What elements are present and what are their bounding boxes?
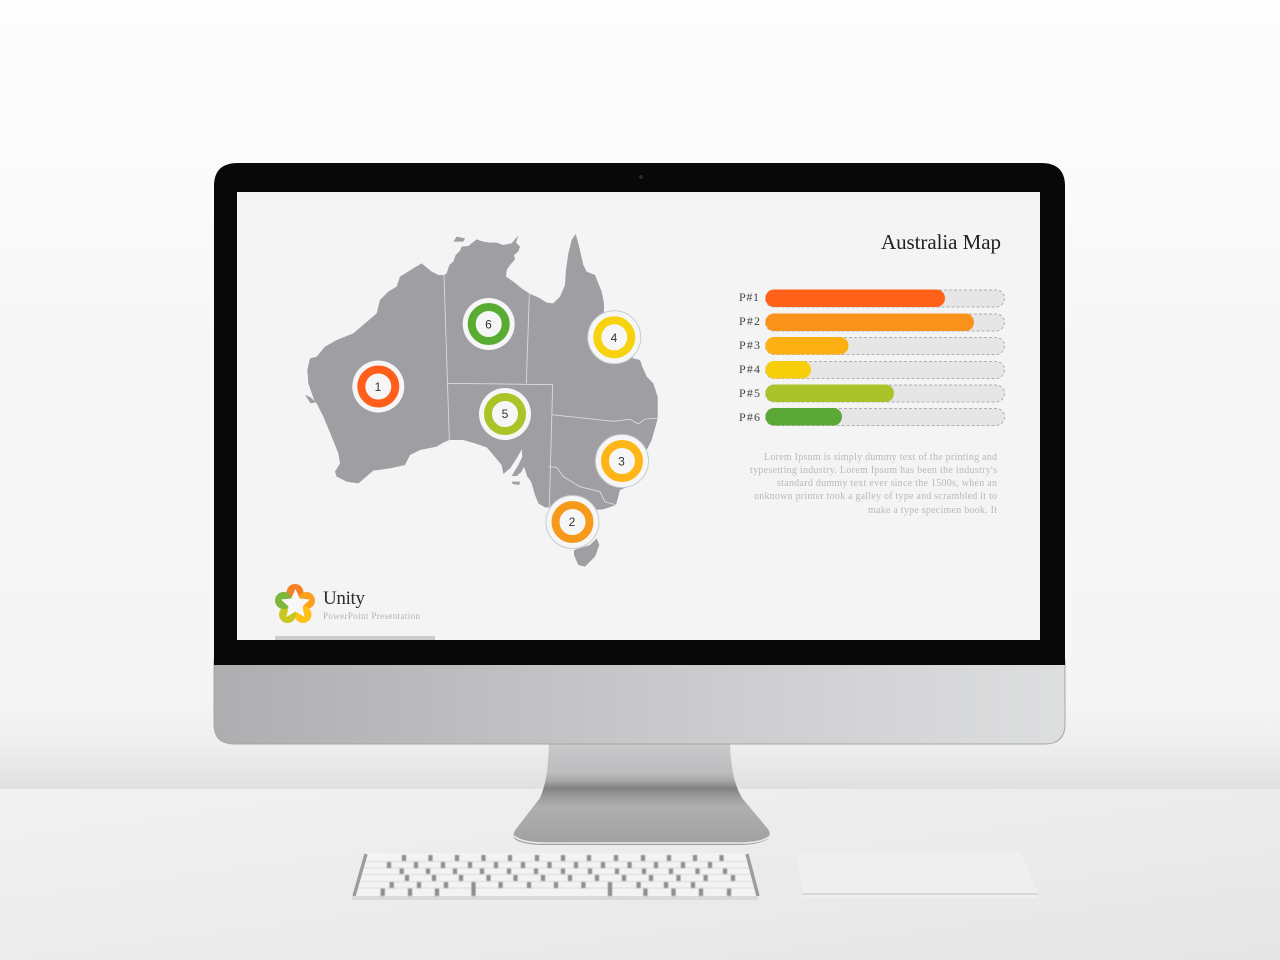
Tasmania [574, 538, 599, 567]
row P#1 [739, 290, 1004, 307]
marker 2 [546, 496, 599, 548]
screen panel [237, 192, 1040, 640]
title: Australia Map [881, 230, 1001, 254]
Melville Island [453, 237, 465, 242]
map of Australia [305, 234, 658, 567]
row P#4: P#4 [739, 362, 760, 376]
logo wordmark: Unity [323, 588, 366, 609]
marker 4 [588, 311, 641, 364]
logo tagline: PowerPoint Presentation [323, 611, 420, 621]
row P#6 [739, 408, 1004, 426]
body text: unknown printer took a galley of type and scrambled it to [754, 491, 997, 502]
trackpad [797, 852, 1038, 898]
body text: make a type specimen book. It [868, 505, 997, 516]
webcam [639, 175, 643, 179]
body text: typesetting industry. Lorem Ipsum has been the industry's [750, 465, 997, 476]
footer strip [275, 636, 435, 640]
monitor stand base edge [514, 836, 770, 843]
row P#2 [739, 314, 1004, 331]
row P#5: P#5 [739, 386, 760, 400]
marker 3 [596, 434, 648, 488]
marker 3: 3 [618, 454, 625, 468]
mainland [305, 234, 658, 510]
keyboard row lines [356, 862, 756, 888]
marker 6: 6 [485, 318, 492, 332]
monitor bezel [214, 163, 1065, 665]
row P#3: P#3 [739, 338, 760, 352]
background: desk [0, 789, 1280, 960]
row P#1: P#1 [739, 290, 759, 304]
marker 5 [479, 388, 531, 440]
marker 5: 5 [502, 407, 509, 421]
keyboard front edge [352, 896, 758, 900]
key gaps [383, 855, 733, 896]
row P#6: P#6 [739, 410, 760, 424]
Kangaroo Island [512, 482, 520, 485]
body text: standard dummy text ever since the 1500s, when an [777, 478, 997, 489]
body text [750, 452, 997, 516]
marker 4: 4 [611, 331, 618, 345]
marker 2: 2 [569, 515, 576, 529]
monitor stand [513, 744, 770, 845]
marker 6 [463, 298, 515, 350]
keyboard [352, 853, 758, 900]
marker 1: 1 [375, 380, 382, 394]
row P#4 [739, 361, 1004, 378]
keyboard side edges [354, 854, 758, 896]
marker 1 [352, 360, 404, 412]
logo icon: five-petal star [275, 584, 315, 623]
row P#5 [739, 384, 1004, 402]
row P#2: P#2 [739, 314, 760, 328]
bar chart [739, 290, 1004, 426]
keyboard body [352, 853, 758, 900]
state borders [444, 275, 658, 507]
monitor chin [214, 660, 1065, 744]
body text: Lorem Ipsum is simply dummy text of the printing and [764, 452, 997, 463]
row P#3 [739, 337, 1004, 354]
